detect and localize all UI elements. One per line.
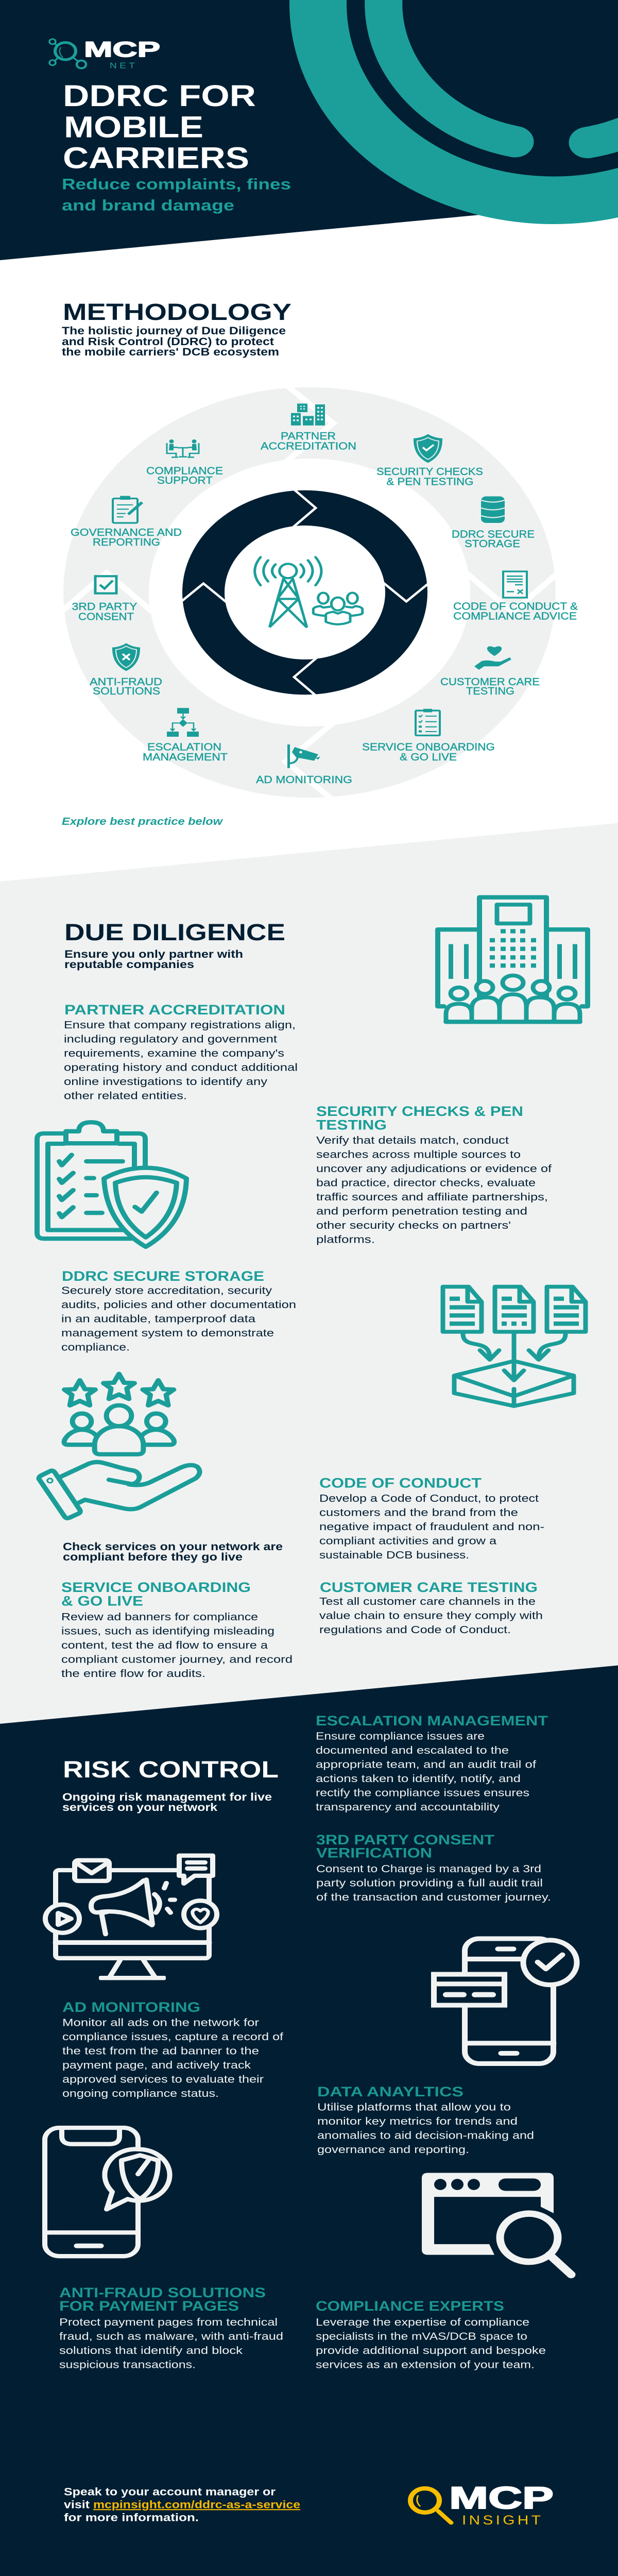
block: escalation management bbox=[316, 1714, 548, 1813]
block: ad monitoring: AD MONITORING bbox=[62, 1999, 200, 2015]
block: DDRC secure storage: in an auditable, tamperproof data bbox=[61, 1313, 256, 1325]
block: service onboarding and go live: Review ad banners for compliance bbox=[61, 1611, 258, 1623]
item: 3rd party consent: 3RD PARTY bbox=[72, 601, 138, 612]
item: anti-fraud solutions: SOLUTIONS bbox=[93, 685, 160, 697]
risk control description: services on your network bbox=[62, 1801, 217, 1814]
block: ad monitoring: the test from the ad banner to the bbox=[62, 2045, 259, 2057]
item: code of conduct and compliance advice: COMPLIANCE ADVICE bbox=[453, 610, 577, 622]
call to action: for more information. bbox=[64, 2511, 199, 2523]
block: 3rd party consent verification: VERIFICATION bbox=[316, 1845, 432, 1861]
subtitle: and brand damage bbox=[62, 197, 234, 214]
item: anti-fraud solutions bbox=[90, 643, 162, 697]
block: anti-fraud solutions: suspicious transactions. bbox=[59, 2359, 196, 2370]
block: data analytics: monitor key metrics for trends and bbox=[317, 2115, 518, 2127]
subtitle: Reduce complaints, fines bbox=[62, 176, 291, 193]
heading: risk control: RISK CONTROL bbox=[63, 1756, 279, 1783]
block: security checks and pen testing: bad practice, director checks, evaluate bbox=[316, 1177, 536, 1189]
block: security checks and pen testing bbox=[316, 1104, 552, 1245]
block: data analytics: DATA ANAYLTICS bbox=[317, 2084, 464, 2100]
block: 3rd party consent verification: party solution providing a full audit trail bbox=[316, 1877, 543, 1889]
item: service onboarding and go live: SERVICE ONBOARDING bbox=[362, 741, 495, 753]
risk control description: Ongoing risk management for live bbox=[62, 1791, 272, 1803]
item: DDRC secure storage bbox=[452, 496, 535, 550]
methodology description: The holistic journey of Due Diligence bbox=[62, 325, 286, 337]
heading: due diligence: DUE DILIGENCE bbox=[64, 919, 285, 945]
panel: hero header bbox=[0, 0, 618, 260]
block: code of conduct: sustainable DCB business. bbox=[319, 1549, 469, 1561]
logo: MCP Insight: MCP bbox=[449, 2481, 554, 2516]
icon: ad monitor with megaphone bbox=[45, 1856, 217, 1980]
block: anti-fraud solutions bbox=[59, 2285, 283, 2370]
item: DDRC secure storage: DDRC SECURE bbox=[452, 529, 535, 540]
block: security checks and pen testing: SECURITY CHECKS & PEN bbox=[316, 1104, 523, 1119]
icon: stars, people and hand bbox=[39, 1374, 200, 1518]
block: customer care testing: CUSTOMER CARE TESTING bbox=[320, 1580, 538, 1595]
logo: MCP Insight bbox=[410, 2481, 554, 2527]
item: escalation management: ESCALATION bbox=[147, 741, 221, 753]
block: anti-fraud solutions: Protect payment pages from technical bbox=[59, 2316, 278, 2328]
block: ad monitoring: Monitor all ads on the network for bbox=[62, 2016, 259, 2028]
decorative teal rings bbox=[318, 0, 618, 200]
item: partner accreditation bbox=[261, 403, 356, 452]
call to action: visit bbox=[64, 2498, 90, 2511]
block: service onboarding and go live bbox=[61, 1580, 293, 1680]
block: DDRC secure storage bbox=[61, 1268, 296, 1353]
risk control description bbox=[62, 1791, 272, 1814]
methodology description bbox=[62, 325, 286, 358]
item: DDRC secure storage: STORAGE bbox=[465, 538, 520, 550]
item: code of conduct and compliance advice bbox=[453, 571, 578, 622]
item: anti-fraud solutions: ANTI-FRAUD bbox=[90, 676, 162, 688]
block: service onboarding and go live: compliant customer journey, and record bbox=[61, 1653, 293, 1665]
block: escalation management: appropriate team, and an audit trail of bbox=[316, 1759, 537, 1770]
item: ad monitoring bbox=[256, 744, 352, 786]
logo: MCP Net: MCP bbox=[84, 37, 160, 61]
block: escalation management: documented and escalated to the bbox=[316, 1744, 509, 1756]
item: customer care testing: TESTING bbox=[466, 685, 514, 697]
block: 3rd party consent verification: of the transaction and customer journey. bbox=[316, 1891, 551, 1903]
item: governance and reporting: REPORTING bbox=[93, 536, 160, 548]
item: escalation management: MANAGEMENT bbox=[143, 751, 228, 762]
block: ad monitoring bbox=[62, 1999, 284, 2099]
block: partner accreditation: requirements, examine the company's bbox=[64, 1047, 284, 1059]
block: check services statement: compliant before they go live bbox=[63, 1551, 243, 1563]
block: DDRC secure storage: DDRC SECURE STORAGE bbox=[62, 1268, 264, 1284]
block: DDRC secure storage: Securely store accreditation, security bbox=[61, 1285, 272, 1296]
block: ad monitoring: approved services to evaluate their bbox=[62, 2073, 264, 2085]
block: ad monitoring: payment page, and actively track bbox=[62, 2059, 251, 2071]
block: escalation management: actions taken to identify, notify, and bbox=[316, 1773, 521, 1785]
block: ad monitoring: ongoing compliance status. bbox=[62, 2088, 219, 2099]
item: customer care testing bbox=[440, 646, 540, 697]
block: compliance experts: services as an extension of your team. bbox=[316, 2359, 535, 2370]
block: service onboarding and go live: & GO LIVE bbox=[61, 1594, 143, 1609]
block: service onboarding and go live: SERVICE ONBOARDING bbox=[61, 1580, 251, 1595]
block: data analytics: governance and reporting. bbox=[317, 2144, 469, 2156]
title bbox=[63, 79, 256, 175]
block: partner accreditation: Ensure that company registrations align, bbox=[64, 1019, 296, 1030]
block: partner accreditation: online investigations to identify any bbox=[64, 1076, 267, 1087]
title: DDRC FOR bbox=[63, 79, 256, 113]
block: partner accreditation: including regulatory and government bbox=[64, 1033, 277, 1045]
panel: methodology bbox=[61, 298, 578, 827]
item: escalation management bbox=[143, 708, 228, 762]
block: data analytics bbox=[317, 2084, 534, 2156]
block: security checks and pen testing: TESTING bbox=[316, 1117, 387, 1133]
block: customer care testing: Test all customer care channels in the bbox=[319, 1596, 536, 1607]
block: escalation management: transparency and accountability bbox=[316, 1801, 500, 1813]
block: 3rd party consent verification: 3RD PARTY CONSENT bbox=[316, 1832, 494, 1848]
logo: MCP Net bbox=[49, 37, 160, 70]
block: code of conduct: CODE OF CONDUCT bbox=[319, 1476, 482, 1491]
panel: due diligence bbox=[0, 823, 618, 1724]
heading: methodology: METHODOLOGY bbox=[63, 298, 291, 325]
block: service onboarding and go live: content, test the ad flow to ensure a bbox=[61, 1639, 268, 1651]
item: service onboarding and go live: & GO LIVE bbox=[400, 751, 457, 762]
block: service onboarding and go live: the entire flow for audits. bbox=[61, 1668, 205, 1680]
block: customer care testing: value chain to ensure they comply with bbox=[319, 1609, 543, 1621]
item: code of conduct and compliance advice: CODE OF CONDUCT & bbox=[453, 600, 578, 612]
item: 3rd party consent bbox=[72, 576, 138, 622]
item: governance and reporting: GOVERNANCE AND bbox=[71, 527, 182, 538]
block: security checks and pen testing: other security checks on partners' bbox=[316, 1219, 511, 1231]
subtitle bbox=[62, 176, 291, 214]
panel: risk control bbox=[0, 1665, 618, 2576]
block: data analytics: anomalies to aid decision-making and bbox=[317, 2130, 534, 2141]
block: security checks and pen testing: platforms. bbox=[316, 1233, 375, 1245]
icon: clipboard with shield bbox=[37, 1122, 186, 1247]
item: compliance support: SUPPORT bbox=[157, 474, 213, 486]
block: anti-fraud solutions: fraud, such as malware, with anti-fraud bbox=[59, 2331, 283, 2342]
block: partner accreditation bbox=[64, 1003, 298, 1101]
block: customer care testing: regulations and Code of Conduct. bbox=[319, 1624, 511, 1636]
icon: browser with magnifier bbox=[422, 2173, 571, 2275]
block: compliance experts: provide additional support and bespoke bbox=[316, 2345, 546, 2357]
block: check services statement: Check services on your network are bbox=[63, 1540, 283, 1553]
block: partner accreditation: PARTNER ACCREDITATION bbox=[64, 1003, 285, 1018]
logo: MCP Insight: INSIGHT bbox=[462, 2513, 541, 2527]
block: DDRC secure storage: audits, policies and other documentation bbox=[61, 1299, 296, 1311]
block: partner accreditation: other related entities. bbox=[64, 1090, 187, 1101]
item: ad monitoring: AD MONITORING bbox=[256, 774, 352, 786]
logo: MCP Net: NET bbox=[110, 61, 135, 70]
call to action: Speak to your account manager or bbox=[64, 2485, 276, 2498]
due diligence description bbox=[64, 948, 243, 971]
block: anti-fraud solutions: ANTI-FRAUD SOLUTIONS bbox=[59, 2285, 266, 2301]
block: security checks and pen testing: traffic sources and affiliate partnerships, bbox=[316, 1191, 548, 1203]
block: escalation management: Ensure compliance issues are bbox=[316, 1731, 485, 1742]
due diligence description: reputable companies bbox=[64, 958, 194, 971]
title: CARRIERS bbox=[63, 141, 249, 175]
block: DDRC secure storage: management system to demonstrate bbox=[61, 1327, 274, 1339]
block: compliance experts: specialists in the mVAS/DCB space to bbox=[316, 2331, 527, 2342]
methodology description: the mobile carriers' DCB ecosystem bbox=[62, 346, 279, 358]
block: compliance experts: Leverage the expertise of compliance bbox=[316, 2316, 529, 2328]
item: governance and reporting bbox=[71, 496, 182, 548]
methodology description: and Risk Control (DDRC) to protect bbox=[62, 335, 274, 348]
block: security checks and pen testing: uncover any adjudications or evidence of bbox=[316, 1163, 552, 1175]
item: service onboarding and go live bbox=[362, 709, 495, 762]
block: service onboarding and go live: issues, such as identifying misleading bbox=[61, 1625, 274, 1637]
block: escalation management: rectify the compliance issues ensures bbox=[316, 1787, 529, 1799]
block: security checks and pen testing: Verify that details match, conduct bbox=[316, 1134, 509, 1146]
block: 3rd party consent verification: Consent to Charge is managed by a 3rd bbox=[316, 1863, 541, 1875]
block: anti-fraud solutions: solutions that identify and block bbox=[59, 2345, 243, 2357]
block: compliance experts bbox=[316, 2298, 546, 2370]
block: code of conduct: compliant activities and grow a bbox=[319, 1535, 497, 1547]
item: compliance support bbox=[146, 439, 223, 486]
icon: phone with shield bubble bbox=[45, 2128, 170, 2256]
item: security checks and pen testing: & PEN TESTING bbox=[387, 476, 474, 487]
block: check services statement bbox=[63, 1540, 283, 1563]
item: security checks and pen testing bbox=[376, 434, 483, 487]
item: 3rd party consent: CONSENT bbox=[78, 611, 134, 622]
item: security checks and pen testing: SECURITY CHECKS bbox=[376, 466, 483, 478]
block: code of conduct: negative impact of fraudulent and non- bbox=[319, 1521, 544, 1533]
icon: tower and people bbox=[255, 557, 363, 628]
block: partner accreditation: operating history and conduct additional bbox=[64, 1061, 298, 1073]
block: code of conduct: Develop a Code of Conduct, to protect bbox=[319, 1493, 539, 1504]
due diligence description: Ensure you only partner with bbox=[64, 948, 243, 960]
block: anti-fraud solutions: FOR PAYMENT PAGES bbox=[59, 2298, 239, 2314]
icon: building with people bbox=[438, 897, 588, 1022]
call to explore: Explore best practice below bbox=[62, 816, 224, 827]
block: 3rd party consent verification bbox=[316, 1832, 551, 1903]
icon: documents into box bbox=[443, 1287, 586, 1406]
block: code of conduct: customers and the brand from the bbox=[319, 1506, 518, 1518]
block: security checks and pen testing: searches across multiple sources to bbox=[316, 1148, 521, 1160]
title: MOBILE bbox=[64, 110, 203, 144]
wheel diagram bbox=[61, 385, 578, 800]
icon: phone with card and check bbox=[434, 1939, 577, 2063]
block: DDRC secure storage: compliance. bbox=[61, 1342, 130, 1353]
block: ad monitoring: compliance issues, capture a record of bbox=[62, 2031, 284, 2043]
block: customer care testing bbox=[319, 1580, 543, 1636]
block: compliance experts: COMPLIANCE EXPERTS bbox=[316, 2298, 504, 2314]
item: customer care testing: CUSTOMER CARE bbox=[440, 676, 540, 688]
block: escalation management: ESCALATION MANAGEMENT bbox=[316, 1714, 548, 1729]
block: data analytics: Utilise platforms that allow you to bbox=[317, 2102, 511, 2113]
block: code of conduct bbox=[319, 1476, 544, 1561]
call to action bbox=[64, 2485, 300, 2523]
item: partner accreditation: ACCREDITATION bbox=[261, 440, 356, 452]
block: security checks and pen testing: and perform penetration testing and bbox=[316, 1205, 527, 1217]
call to action: mcpinsight.com/ddrc-as-a-service bbox=[93, 2498, 300, 2511]
item: partner accreditation: PARTNER bbox=[281, 430, 336, 442]
item: compliance support: COMPLIANCE bbox=[146, 465, 223, 477]
